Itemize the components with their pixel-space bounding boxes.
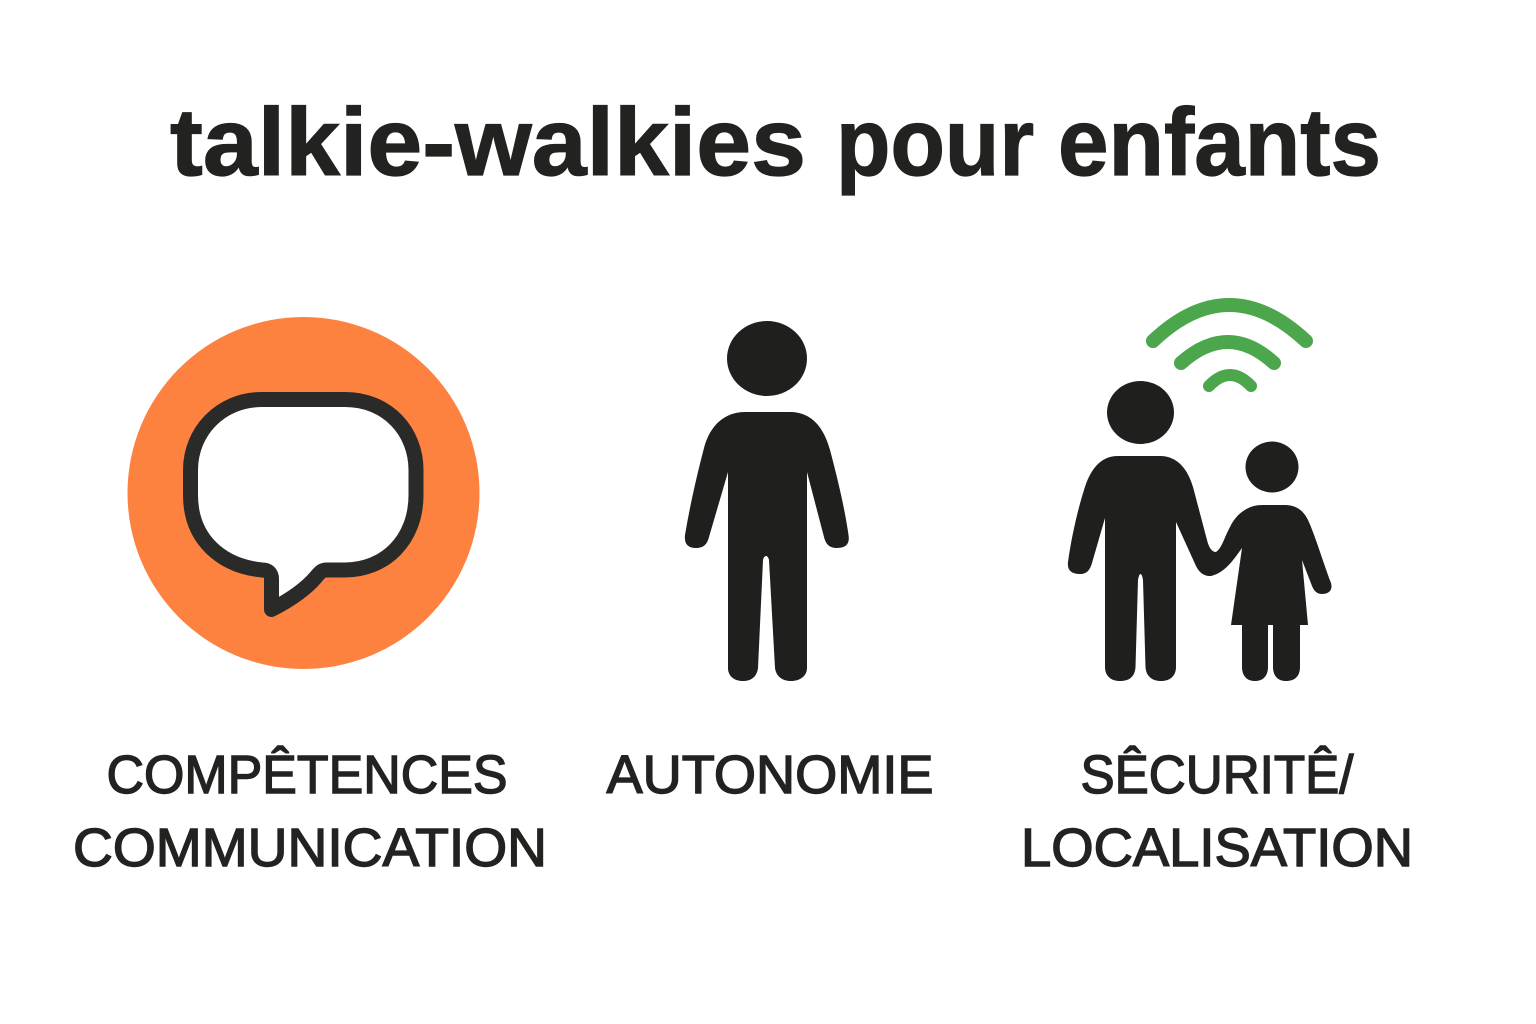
label: sécurité localisation: LOCALISATION <box>1021 818 1413 878</box>
title: talkie-walkies <box>170 89 806 196</box>
icon: standing person <box>685 321 849 681</box>
icon: adult and child with signal <box>1068 305 1332 681</box>
label: compétences communication: COMMUNICATION <box>73 818 547 878</box>
label: sécurité localisation: SÊCURITÊ/ <box>1080 745 1354 805</box>
child figure <box>1208 442 1332 681</box>
signal waves <box>1153 305 1306 386</box>
title: pour <box>836 89 1034 196</box>
label: compétences communication: COMPÊTENCES <box>106 745 508 805</box>
label: sécurité localisation <box>1021 745 1413 878</box>
title: enfants <box>1058 89 1381 196</box>
title <box>170 89 1381 196</box>
icon: orange circle with speech bubble <box>128 317 480 669</box>
label: compétences communication <box>73 745 547 878</box>
label: autonomie: AUTONOMIE <box>606 745 934 805</box>
adult figure <box>1068 381 1220 681</box>
